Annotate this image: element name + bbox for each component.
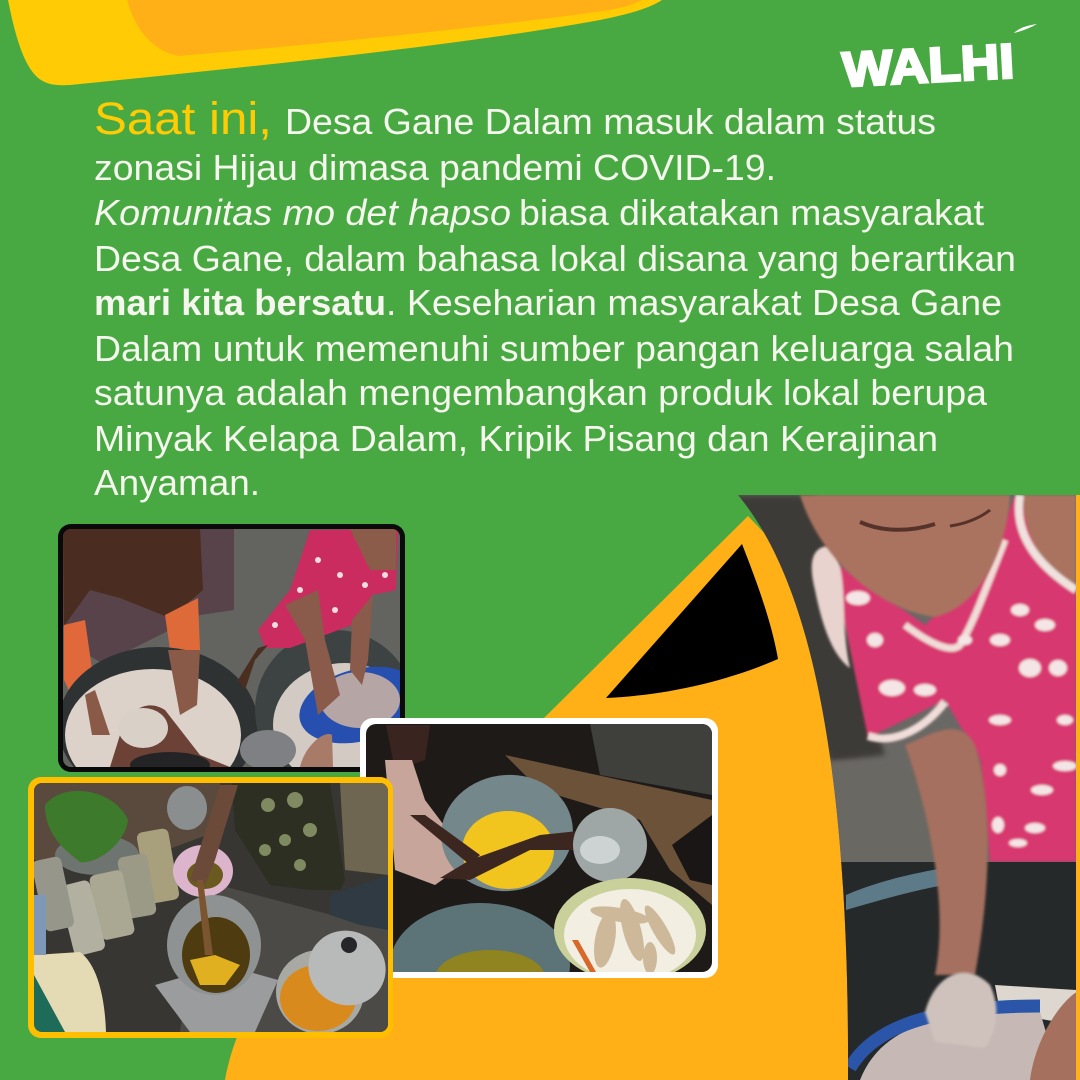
text block: intro paragraph: Minyak Kelapa Dalam, Kripik Pisang dan Kerajinan	[94, 418, 938, 459]
text block: intro paragraph	[94, 93, 1016, 503]
text block: intro paragraph: biasa dikatakan masyarakat	[519, 192, 984, 233]
text block: intro paragraph: Desa Gane Dalam masuk dalam status	[285, 101, 936, 142]
stove	[155, 973, 278, 1032]
text block: intro paragraph: Anyaman.	[94, 462, 260, 503]
girl in pink	[238, 529, 398, 715]
logo: WALHI	[841, 24, 1037, 98]
text block: intro paragraph: satunya adalah mengembangkan produk lokal berupa	[94, 372, 988, 413]
bowl with coconut	[860, 1012, 1060, 1080]
text block: intro paragraph: zonasi Hijau dimasa pandemi COVID-19.	[94, 147, 776, 188]
black triangle shape	[606, 544, 778, 698]
bowl with bananas	[554, 878, 706, 982]
sack and cloth	[340, 783, 388, 875]
photo: jackfruit chips basin, white frame	[360, 718, 718, 978]
text block: intro paragraph: Saat ini,	[94, 93, 272, 144]
silver canister	[167, 786, 207, 830]
lower basin	[393, 903, 570, 972]
face	[800, 495, 1010, 617]
cream bucket	[34, 952, 106, 1032]
pot on stove	[167, 895, 261, 995]
person	[386, 725, 430, 764]
photo: coconut grating, black frame	[58, 524, 405, 772]
text block: intro paragraph: Desa Gane, dalam bahasa lokal disana yang berartikan	[94, 238, 1016, 279]
text block: intro paragraph: mari kita bersatu	[94, 282, 386, 323]
top orange banner shape	[127, 0, 642, 56]
photo: frying chips, yellow frame	[28, 777, 398, 1038]
right basin	[255, 630, 400, 767]
lid with leaves	[55, 835, 139, 875]
arm	[905, 729, 988, 975]
woman in brown	[63, 529, 234, 697]
top yellow banner shape	[8, 0, 662, 85]
pink bowl	[173, 845, 233, 897]
logo: WALHI: WALHI	[841, 35, 1016, 98]
orange decorative shape	[225, 516, 880, 1080]
basin yellow	[442, 774, 573, 892]
jerrycans	[31, 828, 180, 957]
text block: intro paragraph: Komunitas mo det hapso	[94, 192, 511, 233]
basin	[840, 862, 1080, 1080]
text block: intro paragraph: . Keseharian masyarakat Desa Gane	[386, 282, 1002, 323]
dress	[232, 783, 345, 890]
silver pot	[573, 808, 647, 882]
large photo: girl kneading coconut	[730, 495, 1080, 1080]
right edge orange strip	[1076, 495, 1080, 1080]
aluminium lid	[308, 930, 386, 1006]
text block: intro paragraph: Dalam untuk memenuhi sumber pangan keluarga salah	[94, 328, 1014, 369]
pink dress	[812, 495, 1077, 862]
arm	[440, 831, 576, 880]
pan with chips	[276, 950, 364, 1034]
left basin	[63, 647, 258, 767]
